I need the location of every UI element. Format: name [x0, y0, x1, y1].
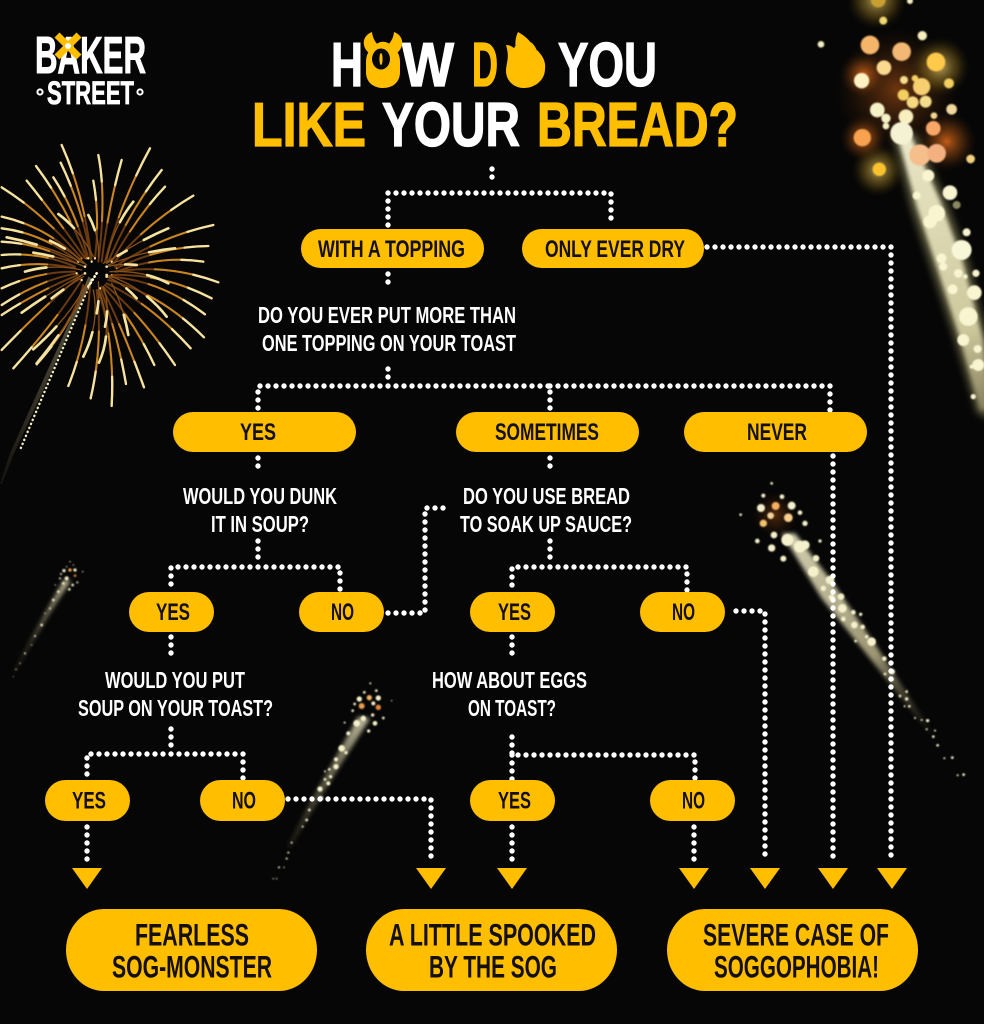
burst launch trail	[0, 273, 97, 485]
comet tail	[287, 717, 370, 848]
option: only ever dry: ONLY EVER DRY	[545, 236, 685, 263]
question: soup on toast	[78, 667, 273, 721]
comet sparks	[13, 561, 83, 677]
title: YOUR: YOUR	[382, 91, 520, 160]
option: dunk no	[299, 592, 384, 632]
question: more than one topping: ONE TOPPING ON YOUR TOAST	[262, 330, 516, 356]
option: sauce no: NO	[672, 599, 695, 626]
question: dunk in soup: WOULD YOU DUNK	[183, 483, 337, 509]
option: yes	[173, 412, 356, 452]
option: never: NEVER	[747, 419, 807, 446]
title: HOW: H	[331, 31, 363, 100]
result: fearless sog-monster	[66, 909, 317, 991]
question: more than one topping	[258, 302, 516, 356]
comet sparks	[273, 682, 392, 879]
option: with a topping: WITH A TOPPING	[318, 236, 465, 263]
title: BREAD?: BREAD?	[537, 91, 738, 160]
logo: Baker Street	[35, 27, 146, 111]
option: soup no	[200, 780, 285, 821]
option: soup no: NO	[232, 788, 256, 814]
option: soup yes: YES	[72, 788, 106, 814]
result: fearless sog-monster: SOG-MONSTER	[112, 948, 272, 984]
icon: windmill sails	[57, 35, 79, 57]
title	[252, 30, 738, 160]
question: dunk in soup	[183, 483, 337, 537]
question: soup on toast: SOUP ON YOUR TOAST?	[78, 695, 273, 721]
question: soak up sauce	[460, 483, 632, 537]
result: a little spooked by the sog	[366, 909, 617, 991]
comet tail	[13, 579, 71, 673]
option: dunk yes	[129, 592, 214, 632]
question: soak up sauce: DO YOU USE BREAD	[463, 483, 630, 509]
comet sparks	[818, 0, 984, 399]
question: dunk in soup: IT IN SOUP?	[211, 511, 309, 537]
title: LIKE: LIKE	[252, 91, 366, 160]
result: severe case of soggophobia	[667, 909, 918, 991]
comet tail	[892, 133, 984, 420]
burst rays	[2, 145, 218, 406]
logo subtitle: STREET	[47, 75, 134, 111]
icon: flame O	[506, 32, 545, 88]
question: eggs on toast: ON TOAST?	[468, 695, 556, 721]
option: sauce no	[640, 592, 725, 632]
firework: large burst	[0, 145, 218, 485]
question: eggs on toast	[432, 667, 587, 721]
result: a little spooked by the sog: BY THE SOG	[429, 948, 557, 984]
title: HOW	[331, 31, 454, 100]
title: HOW: O	[369, 31, 397, 100]
result: fearless sog-monster: FEARLESS	[135, 916, 249, 952]
result: severe case of soggophobia: SEVERE CASE OF	[703, 916, 889, 952]
option: sometimes: SOMETIMES	[495, 419, 599, 446]
firework: centre small comet	[273, 682, 392, 879]
title: HOW: W	[402, 31, 454, 100]
result: severe case of soggophobia: SOGGOPHOBIA!	[714, 948, 879, 984]
option: never	[684, 412, 867, 452]
comet glow	[752, 492, 798, 538]
option: soup yes	[45, 780, 130, 821]
option: dunk yes: YES	[156, 599, 190, 626]
question: eggs on toast: HOW ABOUT EGGS	[432, 667, 587, 693]
title: YOU: YOU	[558, 31, 657, 100]
option: sauce yes	[470, 592, 555, 632]
option: sometimes	[456, 412, 639, 452]
comet tail	[782, 533, 933, 735]
flowchart connectors	[87, 169, 891, 860]
logo side dots	[37, 89, 143, 95]
title: DO: D	[472, 31, 498, 100]
logo wordmark: BAKER	[35, 27, 146, 85]
question: soup on toast: WOULD YOU PUT	[105, 667, 245, 693]
option: eggs no: NO	[682, 788, 705, 814]
option: eggs yes	[470, 780, 555, 821]
comet sparks	[739, 482, 965, 776]
option: sauce yes: YES	[498, 599, 531, 626]
firework: mid right comet	[739, 482, 965, 776]
option: eggs no	[650, 780, 735, 821]
result: a little spooked by the sog: A LITTLE SPOOKED	[389, 916, 596, 952]
title: DO: O	[510, 30, 540, 99]
question: soak up sauce: TO SOAK UP SAUCE?	[460, 511, 632, 537]
option: dunk no: NO	[331, 599, 354, 626]
option: eggs yes: YES	[498, 788, 531, 814]
icon: monster O	[364, 32, 402, 88]
title: DO	[472, 30, 540, 100]
option: only ever dry	[522, 229, 704, 268]
comet glow	[833, 0, 977, 197]
option: yes: YES	[240, 419, 276, 446]
option: with a topping	[301, 229, 484, 268]
firework: top right comet	[818, 0, 984, 420]
firework: bottom left comet	[13, 561, 83, 677]
question: more than one topping: DO YOU EVER PUT MORE THAN	[258, 302, 516, 328]
arrows into results	[72, 868, 907, 889]
